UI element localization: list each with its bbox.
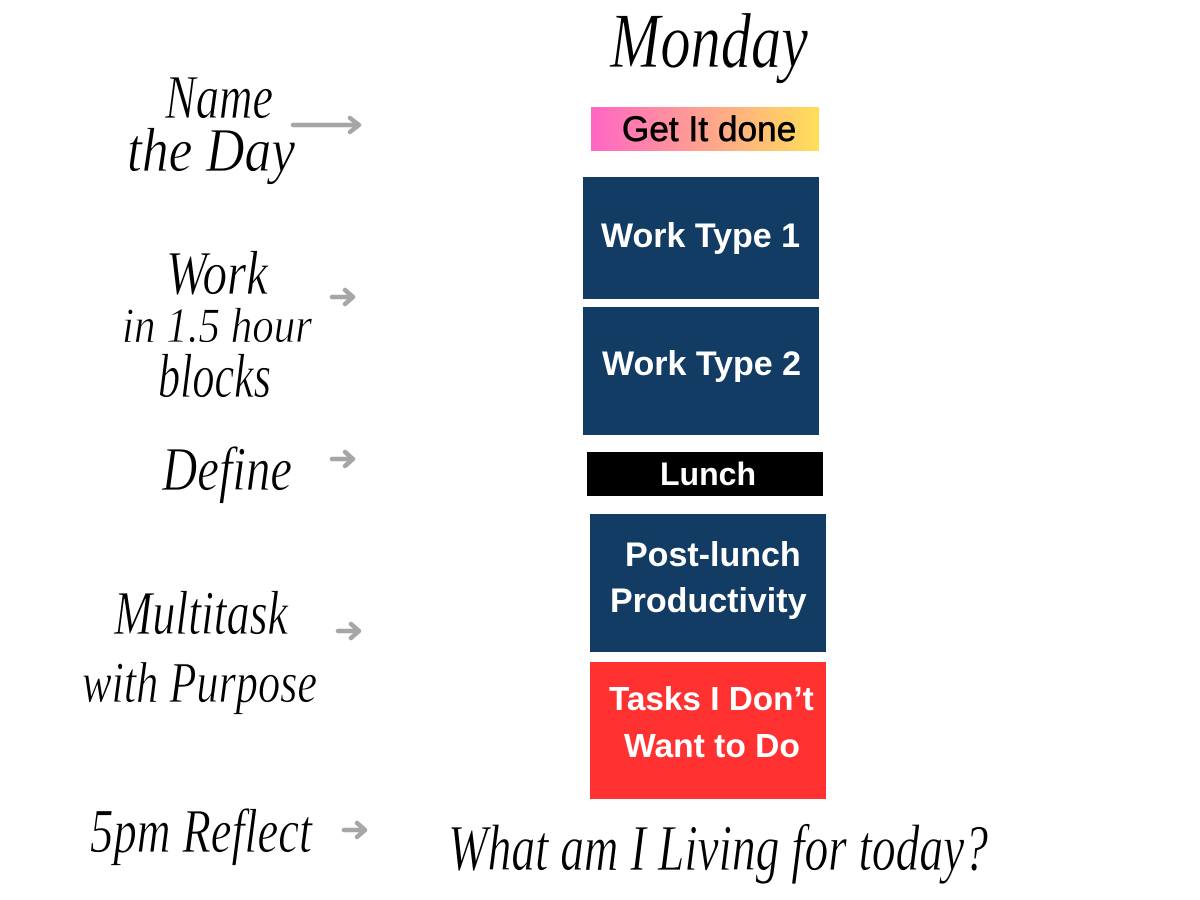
label: 5pm Reflect: 5pm Reflect: [90, 798, 313, 866]
label: Name the Day: the Day: [127, 117, 295, 185]
block: Post-lunch Productivity: Productivity: [610, 582, 806, 620]
label: Multitask with Purpose: [82, 580, 317, 715]
label: Multitask with Purpose: Multitask: [113, 580, 289, 648]
label: Name the Day: [127, 64, 295, 185]
label: Multitask with Purpose: with Purpose: [82, 650, 317, 715]
label: Work in 1.5 hour blocks: [122, 240, 312, 411]
label: Name the Day: Name: [164, 64, 273, 132]
theme bar: Get It done: [591, 107, 819, 151]
block: Tasks I Don't Want to Do: Tasks I Don’t: [609, 681, 814, 718]
arrow: Name the Day: [293, 118, 359, 132]
closing question: What am I Living for today?: What am I Living for today?: [448, 812, 988, 885]
block: Work Type 2: Work Type 2: [602, 345, 801, 383]
arrow: Work blocks: [332, 290, 353, 304]
block: Lunch: Lunch: [660, 456, 756, 492]
label: Work in 1.5 hour blocks: in 1.5 hour: [122, 297, 312, 353]
arrow: Multitask: [338, 624, 359, 638]
label: Work in 1.5 hour blocks: Work: [166, 240, 269, 308]
theme bar: Get It done: Get It done: [622, 110, 796, 149]
label: Work in 1.5 hour blocks: blocks: [158, 343, 271, 411]
label: Define: Define: [161, 436, 292, 504]
arrow: 5pm Reflect: [344, 823, 365, 837]
block: Work Type 1: Work Type 1: [601, 217, 800, 255]
block: Work Type 1: [583, 177, 819, 299]
arrow: Define: [332, 452, 353, 466]
block: Tasks I Don't Want to Do: Want to Do: [624, 728, 800, 765]
block: Work Type 2: [583, 307, 819, 435]
block: Post-lunch Productivity: [590, 514, 826, 652]
block: Lunch: [587, 452, 823, 496]
block: Tasks I Don't Want to Do: [590, 662, 826, 799]
block: Post-lunch Productivity: Post-lunch: [625, 536, 801, 574]
